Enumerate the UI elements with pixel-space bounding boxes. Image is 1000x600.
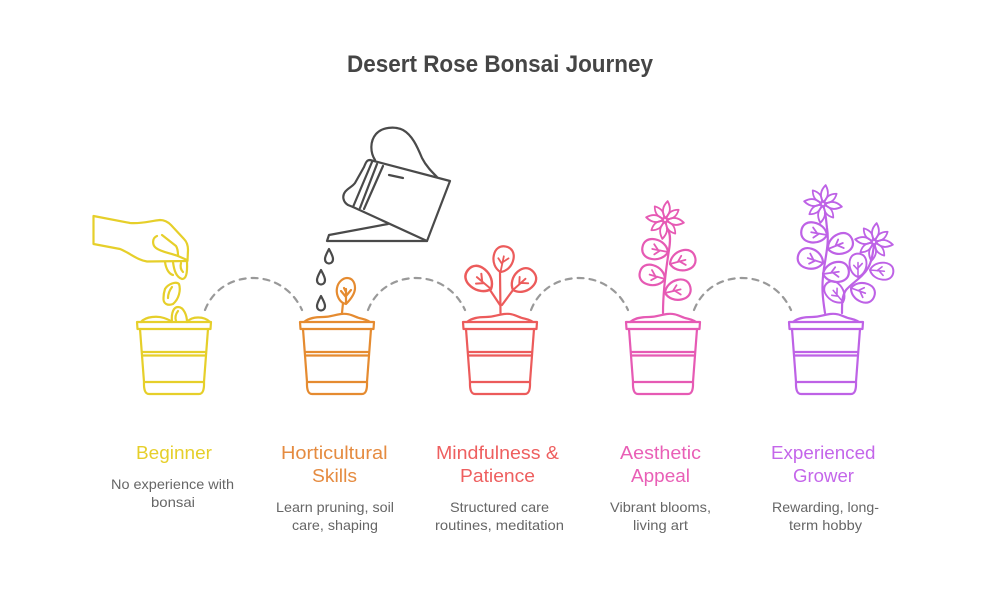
text: Experienced description: Rewarding, long-	[772, 499, 879, 515]
heading: Horticultural Skills	[281, 443, 388, 486]
text: Beginner description: No experience with	[111, 476, 234, 492]
heading: Mindfulness & Patience: Mindfulness &	[436, 443, 559, 463]
icon: sprout pot	[300, 278, 374, 394]
arrow: dashed arc mindfulness to aesthetic	[531, 278, 628, 310]
icon: flowering plant pot	[626, 201, 700, 394]
arrow: dashed arc aesthetic to experienced	[694, 278, 791, 310]
heading: Experienced Grower: Experienced	[771, 443, 876, 463]
text: Mindfulness description: routines, meditation	[435, 517, 564, 533]
text: Aesthetic description	[610, 499, 711, 533]
text: Experienced description: term hobby	[789, 517, 862, 533]
text: Horticultural Skills description: care, shaping	[292, 517, 378, 533]
heading: Experienced Grower: Grower	[793, 466, 854, 486]
icon: hand dropping seed	[94, 216, 188, 305]
icon: water drops	[317, 249, 333, 310]
heading: Horticultural Skills: Skills	[312, 466, 357, 486]
text: Beginner description: bonsai	[151, 494, 195, 510]
icon: mature two-flower plant pot	[789, 185, 894, 394]
arrow: dashed arc horticultural to mindfulness	[368, 278, 465, 310]
arrow: dashed arc beginner to horticultural	[205, 278, 302, 310]
title: Desert Rose Bonsai Journey	[347, 51, 654, 78]
text: Experienced description	[772, 499, 879, 533]
text: Mindfulness description: Structured care	[450, 499, 549, 515]
heading: Horticultural Skills: Horticultural	[281, 443, 388, 463]
icon: three leaf plant pot	[461, 244, 540, 394]
text: Mindfulness description	[435, 499, 564, 533]
text: Aesthetic description: Vibrant blooms,	[610, 499, 711, 515]
heading: Aesthetic Appeal: Aesthetic	[620, 443, 701, 463]
heading: Mindfulness & Patience: Patience	[460, 466, 535, 486]
icon: watering can	[327, 128, 450, 241]
icon: beginner pot	[137, 307, 211, 394]
text: Beginner description	[111, 476, 234, 510]
heading: Beginner: Beginner	[136, 443, 212, 463]
heading: Mindfulness & Patience	[436, 443, 559, 486]
icon: falling seed	[163, 283, 180, 305]
heading: Experienced Grower	[771, 443, 876, 486]
heading: Aesthetic Appeal	[620, 443, 701, 486]
heading: Aesthetic Appeal: Appeal	[631, 466, 690, 486]
text: Horticultural Skills description: Learn pruning, soil	[276, 499, 394, 515]
text: Horticultural Skills description	[276, 499, 394, 533]
text: Aesthetic description: living art	[633, 517, 688, 533]
